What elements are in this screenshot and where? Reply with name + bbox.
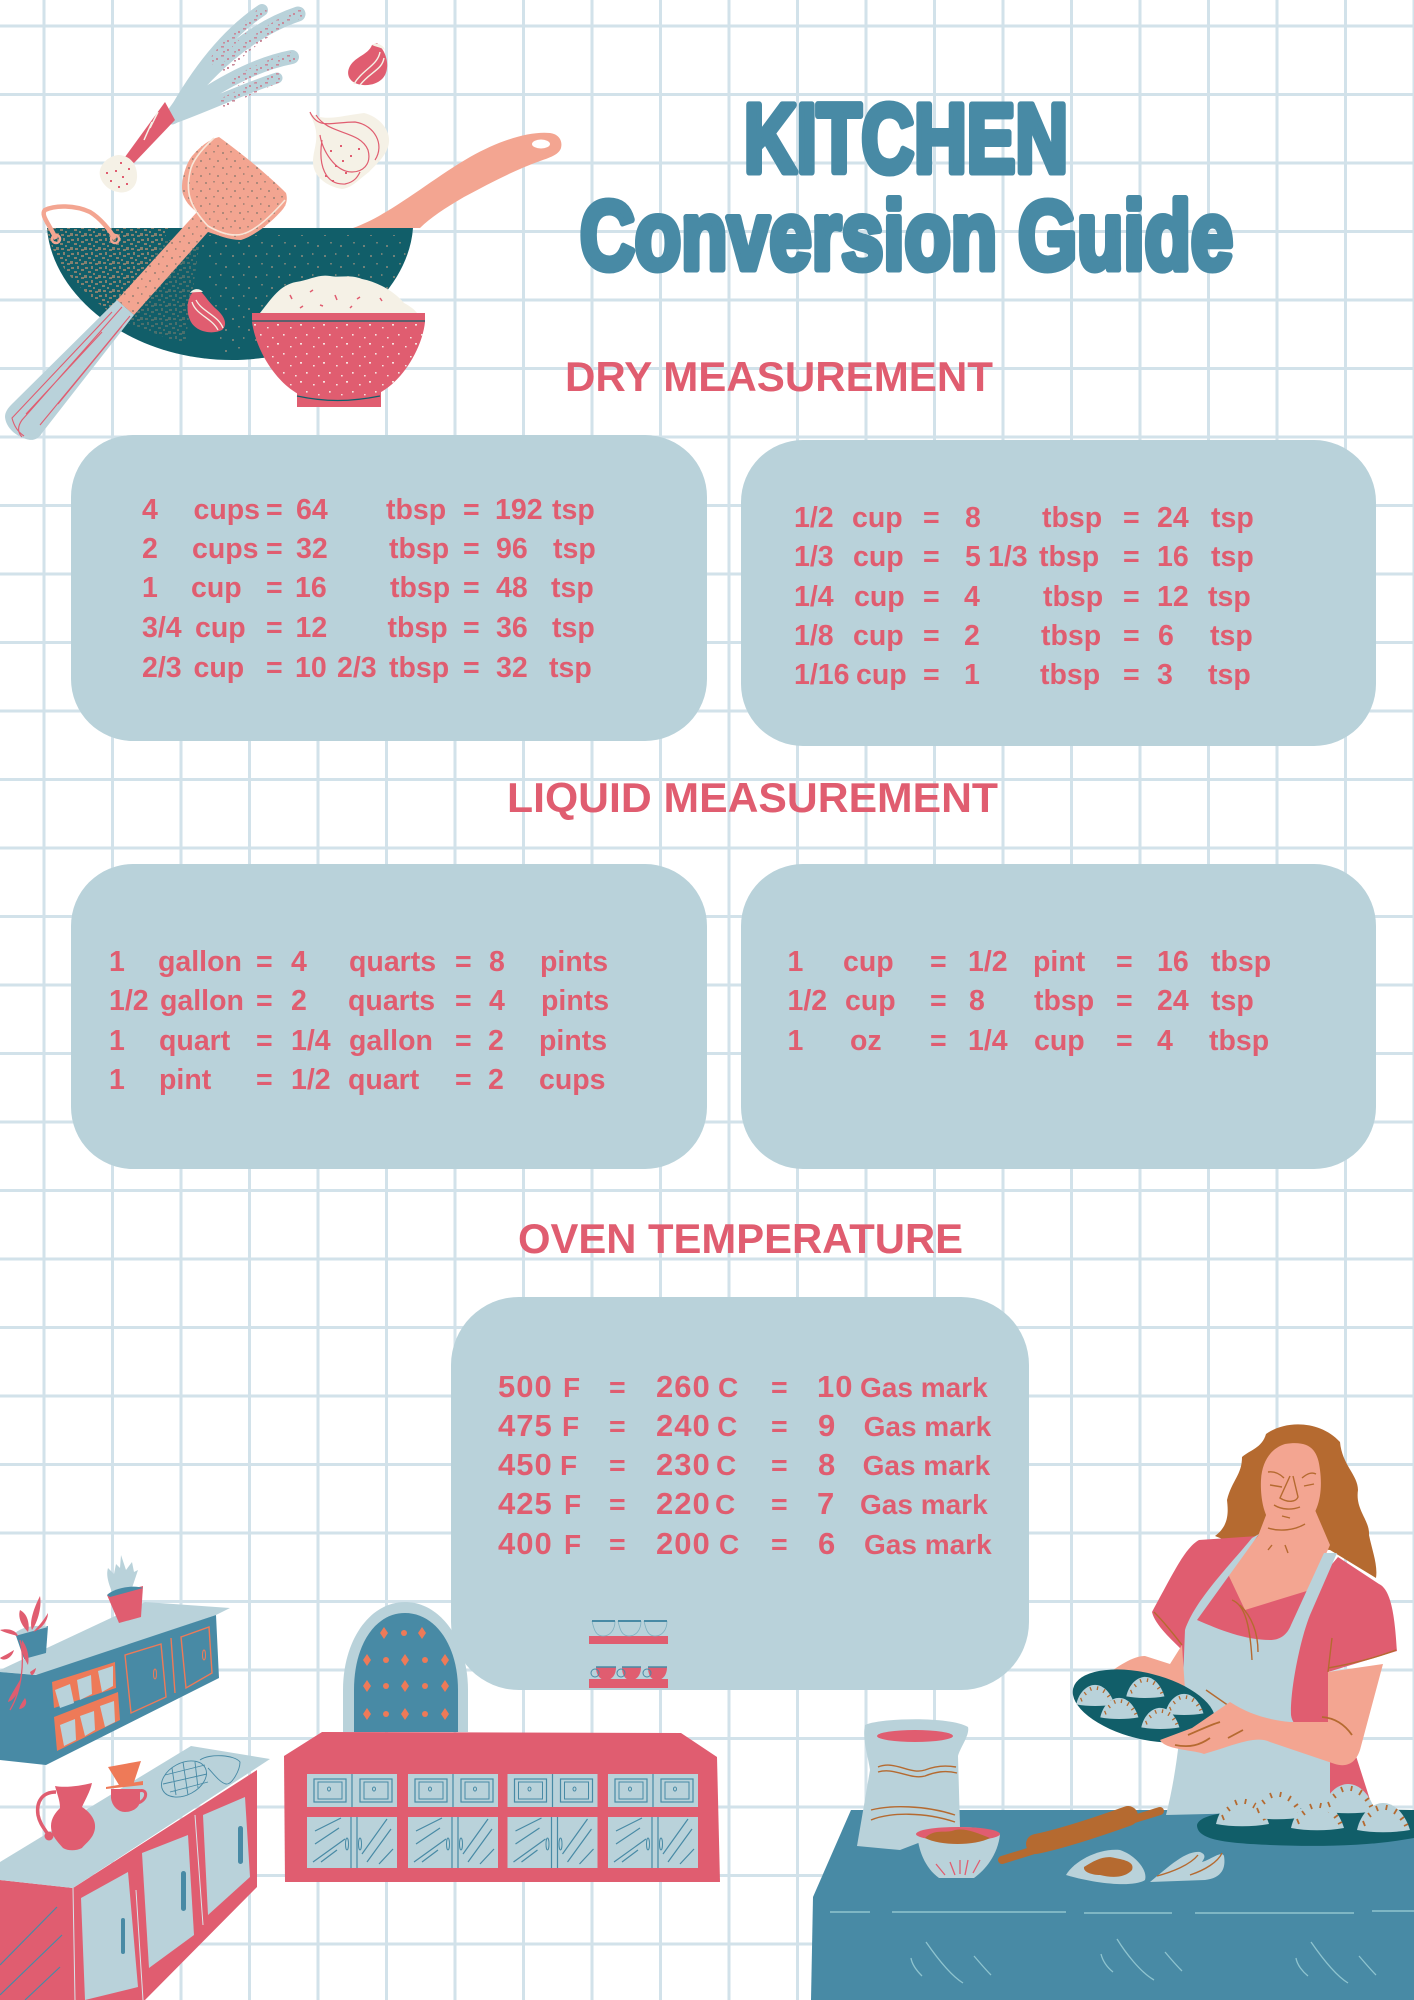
panel: dry measurement right: 8 xyxy=(965,502,981,534)
panel: dry measurement right: 3 xyxy=(1157,659,1173,691)
icon: jug xyxy=(857,1719,968,1850)
panel: dry measurement left: 192 xyxy=(495,494,543,526)
panel: dry measurement right: 1/4 xyxy=(794,581,834,613)
heading: liquid measurement: LIQUID MEASUREMENT xyxy=(507,774,998,821)
panel: oven temperature: 450 xyxy=(498,1447,553,1482)
panel: dry measurement left: 4 xyxy=(142,494,158,526)
panel: oven temperature: 500 xyxy=(498,1369,553,1404)
panel: liquid measurement right: 1/4 xyxy=(968,1025,1008,1057)
panel: dry measurement right: = xyxy=(923,581,940,613)
panel: dry measurement right: 2 xyxy=(964,620,980,652)
face xyxy=(1261,1443,1321,1553)
panel: dry measurement right: 16 xyxy=(1157,541,1189,573)
panel: liquid measurement left: = xyxy=(256,946,273,978)
panel: liquid measurement right: 8 xyxy=(969,985,985,1017)
panel: dry measurement left: cup xyxy=(191,572,242,604)
panel: liquid measurement left: = xyxy=(455,1025,472,1057)
panel: dry measurement left: tbsp xyxy=(390,572,450,604)
icon: rolling pin xyxy=(1002,1811,1160,1860)
panel: liquid measurement left: quart xyxy=(348,1064,420,1096)
panel: dry measurement left: tsp xyxy=(552,494,595,526)
panel: dry measurement left: = xyxy=(266,612,283,644)
panel: oven temperature: C xyxy=(716,1450,736,1481)
panel: dry measurement right: cup xyxy=(853,541,904,573)
panel: dry measurement left: 32 xyxy=(496,652,528,684)
arm and right hand xyxy=(1160,1664,1383,1765)
panel: dry measurement right: 1 xyxy=(964,659,980,691)
panel: dry measurement left: = xyxy=(463,652,480,684)
panel: oven temperature: = xyxy=(771,1450,788,1482)
panel: liquid measurement right: = xyxy=(930,985,947,1017)
panel: dry measurement right: = xyxy=(1123,502,1140,534)
panel: liquid measurement right: 1/2 xyxy=(968,946,1008,978)
panel: liquid measurement right: 1 xyxy=(788,946,804,978)
panel: liquid measurement left: pint xyxy=(159,1064,212,1096)
dress xyxy=(1152,1536,1397,1810)
hair xyxy=(1215,1424,1376,1578)
icon: scallion xyxy=(100,10,298,192)
panel: oven temperature: 240 xyxy=(656,1408,711,1443)
panel: dry measurement right: 5 xyxy=(965,541,981,573)
panel: dry measurement right: cup xyxy=(852,502,903,534)
panel: dry measurement right: 12 xyxy=(1157,581,1189,613)
panel: oven temperature: F xyxy=(564,1529,581,1560)
dress ties and trims xyxy=(1154,1600,1396,1706)
panel: dry measurement left: 3/4 xyxy=(142,612,182,644)
panel: dry measurement left: = xyxy=(463,494,480,526)
panel: oven temperature: = xyxy=(609,1450,626,1482)
panel: liquid measurement right: = xyxy=(930,1025,947,1057)
panel: liquid measurement left: quarts xyxy=(348,985,435,1017)
panel: oven temperature: = xyxy=(771,1411,788,1443)
panel: dry measurement left: 48 xyxy=(496,572,528,604)
panel: dry measurement left: = xyxy=(463,612,480,644)
panel: oven temperature: = xyxy=(609,1489,626,1521)
panel: liquid measurement right: oz xyxy=(850,1025,882,1057)
panel: dry measurement left: tbsp xyxy=(386,494,446,526)
panel: liquid measurement left: = xyxy=(455,1064,472,1096)
oven arch xyxy=(343,1602,468,1732)
panel: oven temperature: Gas mark xyxy=(864,1529,992,1560)
panel: dry measurement left: tsp xyxy=(549,652,592,684)
panel: dry measurement left: tbsp xyxy=(389,652,449,684)
panel: dry measurement right: = xyxy=(923,659,940,691)
panel: liquid measurement left: = xyxy=(455,985,472,1017)
panel: oven temperature: 475 xyxy=(498,1408,553,1443)
panel: dry measurement left: 64 xyxy=(296,494,328,526)
panel: liquid measurement right: tbsp xyxy=(1209,1025,1269,1057)
panel: oven temperature: Gas mark xyxy=(863,1450,991,1481)
panel: dry measurement right: = xyxy=(1123,620,1140,652)
panel: oven temperature: 6 xyxy=(818,1526,836,1561)
panel: dry measurement right: 1/2 xyxy=(794,502,834,534)
panel: liquid measurement left: = xyxy=(256,985,273,1017)
panel: oven temperature: = xyxy=(609,1411,626,1443)
panel: liquid measurement right: cup xyxy=(845,985,896,1017)
apron xyxy=(1166,1534,1337,1815)
panel: liquid measurement left: 1 xyxy=(109,1064,125,1096)
icon: wok xyxy=(44,206,413,360)
panel: liquid measurement left: 2 xyxy=(488,1025,504,1057)
panel: dry measurement left: cup xyxy=(194,652,244,684)
panel: dry measurement right: 1/16 xyxy=(794,659,849,691)
panel: liquid measurement left: = xyxy=(256,1064,273,1096)
panel: oven temperature: Gas mark xyxy=(860,1489,988,1520)
panel: oven temperature: = xyxy=(771,1529,788,1561)
panel: dry measurement right: = xyxy=(1123,581,1140,613)
panel: liquid measurement left: 1/2 xyxy=(291,1064,331,1096)
panel: dry measurement right: 6 xyxy=(1158,620,1174,652)
panel: dry measurement right: tsp xyxy=(1211,502,1254,534)
panel: liquid measurement left: 1 xyxy=(109,1025,125,1057)
panel: oven temperature xyxy=(451,1297,1029,1690)
panel: liquid measurement left: pints xyxy=(540,946,608,978)
icon: mesh bag xyxy=(155,1754,240,1804)
panel: liquid measurement right xyxy=(741,864,1376,1169)
panel: liquid measurement right: 24 xyxy=(1157,985,1189,1017)
panel: dry measurement left: cups xyxy=(192,533,259,565)
panel: dry measurement left: = xyxy=(266,533,283,565)
panel: oven temperature: 425 xyxy=(498,1486,553,1521)
panel: oven temperature: C xyxy=(715,1489,735,1520)
panel: dry measurement right: cup xyxy=(854,581,905,613)
panel: liquid measurement left: gallon xyxy=(158,946,242,978)
panel: liquid measurement left: gallon xyxy=(160,985,244,1017)
panel: liquid measurement left: = xyxy=(455,946,472,978)
panel: dry measurement right: tsp xyxy=(1211,541,1254,573)
panel: liquid measurement left: 1/2 xyxy=(109,985,149,1017)
panel: dry measurement right: tsp xyxy=(1210,620,1253,652)
panel: dry measurement right: 1/3 xyxy=(794,541,834,573)
panel: dry measurement left: 16 xyxy=(295,572,327,604)
panel: liquid measurement right: cup xyxy=(843,946,894,978)
icon: wok handle xyxy=(353,133,561,228)
panel: liquid measurement left xyxy=(71,864,707,1169)
panel: liquid measurement right: pint xyxy=(1033,946,1086,978)
panel: liquid measurement right: = xyxy=(1116,946,1133,978)
panel: oven temperature: 220 xyxy=(656,1486,711,1521)
panel: liquid measurement right: = xyxy=(1116,1025,1133,1057)
panel: dry measurement right: tbsp xyxy=(1041,620,1101,652)
panel: oven temperature: 260 xyxy=(656,1369,711,1404)
panel: dry measurement right: 24 xyxy=(1157,502,1189,534)
panel: dry measurement right: cup xyxy=(853,620,904,652)
panel: liquid measurement left: 1 xyxy=(109,946,125,978)
panel: dry measurement left: 36 xyxy=(496,612,528,644)
icon: garlic clove xyxy=(348,43,387,85)
panel: liquid measurement left: 8 xyxy=(489,946,505,978)
panel: liquid measurement left: pints xyxy=(541,985,609,1017)
panel: oven temperature: = xyxy=(771,1489,788,1521)
title: KITCHEN xyxy=(744,84,1068,193)
panel: liquid measurement right: cup xyxy=(1034,1025,1085,1057)
kitchen table xyxy=(811,1810,1414,2000)
panel: oven temperature: = xyxy=(609,1529,626,1561)
panel: dry measurement left: tbsp xyxy=(389,533,449,565)
panel: dry measurement right: tbsp xyxy=(1040,659,1100,691)
panel: dry measurement right: = xyxy=(1123,659,1140,691)
panel: oven temperature: = xyxy=(609,1372,626,1404)
icon: garlic clove in wok xyxy=(188,289,225,332)
heading: oven temperature: OVEN TEMPERATURE xyxy=(518,1215,963,1262)
panel: dry measurement right: tbsp xyxy=(1043,581,1103,613)
plate of dumplings on table xyxy=(1197,1784,1414,1846)
icon: rice bowl xyxy=(252,276,425,407)
icon: filling bowl xyxy=(916,1827,1000,1878)
panel: dry measurement left: = xyxy=(266,494,283,526)
panel: liquid measurement left: = xyxy=(256,1025,273,1057)
panel: liquid measurement left: gallon xyxy=(349,1025,433,1057)
panel: liquid measurement right: = xyxy=(930,946,947,978)
panel: liquid measurement right: 1 xyxy=(788,1025,804,1057)
panel: liquid measurement left: quart xyxy=(159,1025,231,1057)
panel: dry measurement right: 1/3 xyxy=(988,541,1028,573)
panel: liquid measurement left: 2 xyxy=(488,1064,504,1096)
panel: dry measurement left: cup xyxy=(195,612,246,644)
panel: dry measurement right: tsp xyxy=(1208,659,1251,691)
panel: oven temperature: 9 xyxy=(818,1408,836,1443)
panel: dry measurement right: tbsp xyxy=(1039,541,1099,573)
panel: dry measurement left: = xyxy=(463,572,480,604)
panel: liquid measurement right: = xyxy=(1116,985,1133,1017)
panel: dry measurement left: = xyxy=(266,572,283,604)
panel: dry measurement left: tbsp xyxy=(388,612,448,644)
panel: liquid measurement right: 4 xyxy=(1157,1025,1173,1057)
panel: dry measurement left: 2/3 xyxy=(337,652,377,684)
title: Conversion Guide xyxy=(580,181,1233,290)
panel: dry measurement left: 10 xyxy=(295,652,327,684)
panel: oven temperature: 200 xyxy=(656,1526,711,1561)
panel: oven temperature: Gas mark xyxy=(860,1372,988,1403)
panel: dry measurement right: tbsp xyxy=(1042,502,1102,534)
panel: oven temperature: Gas mark xyxy=(864,1411,992,1442)
red kitchen cabinet xyxy=(284,1732,720,1882)
icon: potted succulent xyxy=(107,1555,143,1623)
illustration: woman holding plate of dumplings xyxy=(1065,1424,1397,1815)
panel: dry measurement right: tsp xyxy=(1208,581,1251,613)
panel: dry measurement left: 32 xyxy=(296,533,328,565)
panel: liquid measurement left: 2 xyxy=(291,985,307,1017)
panel: oven temperature: = xyxy=(771,1372,788,1404)
panel: oven temperature: F xyxy=(563,1372,580,1403)
panel: liquid measurement left: 4 xyxy=(291,946,307,978)
icon: potted red plant xyxy=(0,1596,48,1710)
panel: liquid measurement right: tbsp xyxy=(1211,946,1271,978)
upper cabinet with plants xyxy=(0,1555,230,1765)
panel: oven temperature: 10 xyxy=(817,1369,853,1404)
panel: dry measurement right: = xyxy=(923,502,940,534)
icon: dough with filling xyxy=(1066,1850,1145,1884)
panel: oven temperature: F xyxy=(564,1489,581,1520)
panel: dry measurement right: = xyxy=(1123,541,1140,573)
panel: dry measurement right: 1/8 xyxy=(794,620,834,652)
panel: oven temperature: 8 xyxy=(818,1447,836,1482)
panel: oven temperature: C xyxy=(717,1411,737,1442)
panel: oven temperature: C xyxy=(718,1372,738,1403)
panel: liquid measurement right: tbsp xyxy=(1034,985,1094,1017)
panel: oven temperature: 7 xyxy=(817,1486,835,1521)
title xyxy=(580,84,1233,290)
panel: dry measurement left: = xyxy=(266,652,283,684)
panel: liquid measurement left: quarts xyxy=(349,946,436,978)
panel: dry measurement left: 1 xyxy=(142,572,158,604)
panel: liquid measurement left: pints xyxy=(539,1025,607,1057)
panel: dry measurement right: = xyxy=(923,541,940,573)
panel: oven temperature: F xyxy=(562,1411,579,1442)
left hand xyxy=(1101,1645,1185,1690)
panel: liquid measurement left: 4 xyxy=(489,985,505,1017)
panel: dry measurement right: = xyxy=(923,620,940,652)
icon: cup shelves xyxy=(589,1620,668,1688)
panel: dry measurement left xyxy=(71,435,707,741)
panel: oven temperature: F xyxy=(560,1450,577,1481)
panel: liquid measurement left: cups xyxy=(539,1064,606,1096)
panel: dry measurement left: tsp xyxy=(553,533,596,565)
heading: dry measurement: DRY MEASUREMENT xyxy=(565,353,993,400)
icon: spatula xyxy=(5,137,287,440)
panel: oven temperature: C xyxy=(719,1529,739,1560)
lower counter with pitcher and dripper xyxy=(0,1746,270,2000)
panel: dry measurement left: 2/3 xyxy=(142,652,182,684)
panel: dry measurement left: = xyxy=(463,533,480,565)
panel: liquid measurement left: 1/4 xyxy=(291,1025,331,1057)
panel: dry measurement left: 2 xyxy=(142,533,158,565)
panel: dry measurement right: cup xyxy=(856,659,907,691)
panel: dry measurement left: 96 xyxy=(496,533,528,565)
panel: oven temperature: 400 xyxy=(498,1526,553,1561)
panel: dry measurement left: tsp xyxy=(552,612,595,644)
panel: liquid measurement right: 16 xyxy=(1157,946,1189,978)
panel: dry measurement left: 12 xyxy=(296,612,327,644)
icon: cup and dripper xyxy=(106,1761,146,1812)
skin: neck and chest xyxy=(1227,1510,1330,1615)
panel: liquid measurement right: 1/2 xyxy=(788,985,827,1017)
icon: pitcher xyxy=(38,1783,95,1850)
panel: dry measurement left: tsp xyxy=(551,572,594,604)
icon: garlic bulb xyxy=(309,112,389,189)
panel: dry measurement left: cups xyxy=(194,494,260,526)
panel: oven temperature: 230 xyxy=(656,1447,711,1482)
panel: dry measurement right xyxy=(741,440,1376,746)
panel: liquid measurement right: tsp xyxy=(1211,985,1254,1017)
panel: dry measurement right: 4 xyxy=(964,581,980,613)
plate of dumplings xyxy=(1065,1656,1223,1756)
illustration: wok, scallion, garlic and rice bowl xyxy=(5,10,561,440)
icon: folded dumplings xyxy=(1150,1852,1224,1882)
